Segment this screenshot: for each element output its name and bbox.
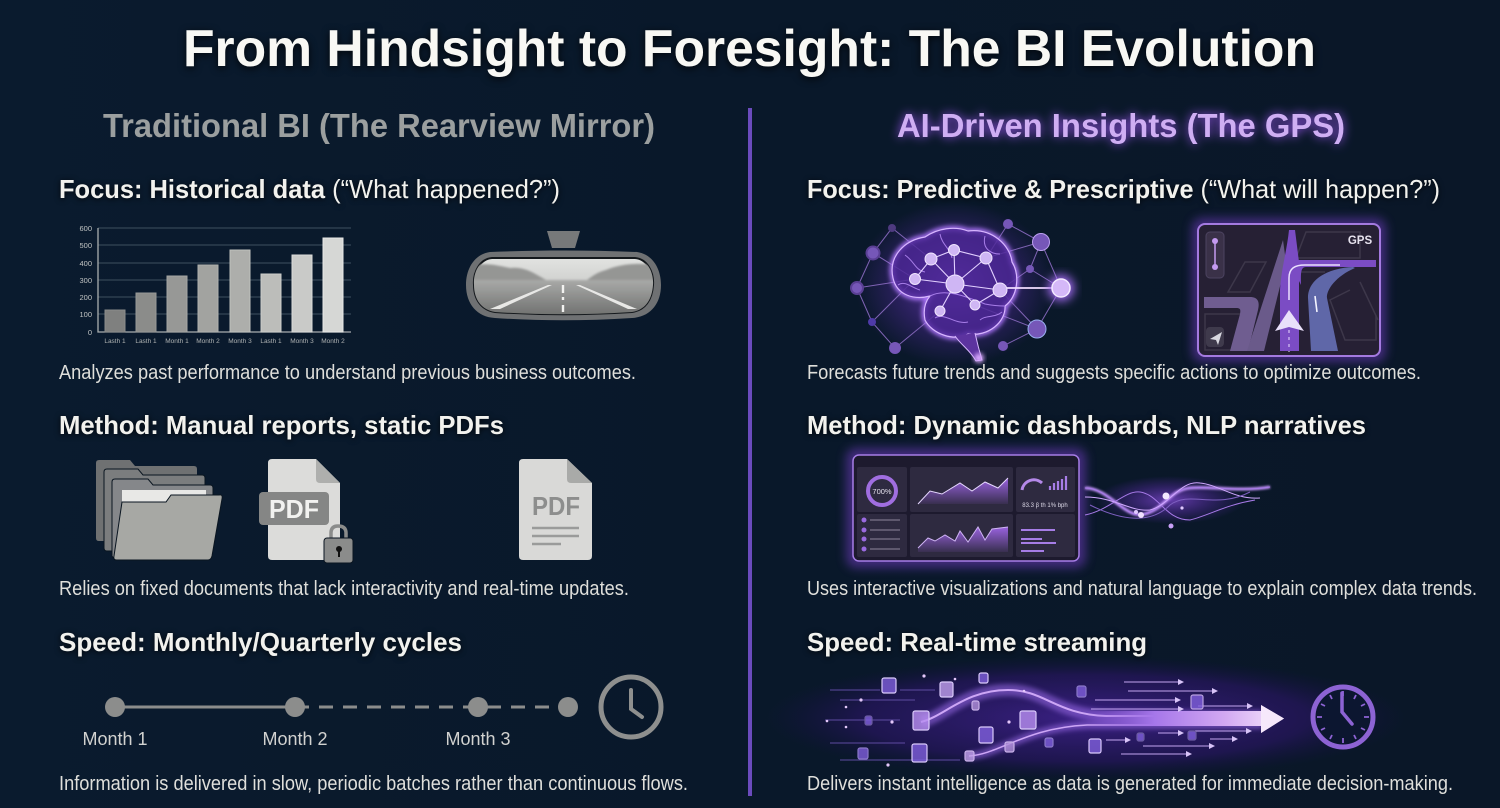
icon: locked PDF xyxy=(259,459,353,563)
illustration: data stream arrow xyxy=(765,656,1405,780)
icon: PDF document xyxy=(519,459,592,560)
text: method description: Relies on fixed documents that lack interactivity and real-time updates. xyxy=(59,578,629,600)
bar chart: Lasth 1 xyxy=(260,338,282,345)
timeline: Month 1 xyxy=(82,729,148,749)
subheading: speed: Speed: Monthly/Quarterly cycles xyxy=(59,627,462,657)
icon: PDF document: PDF xyxy=(532,491,580,521)
icon: GPS navigation screen: GPS xyxy=(1348,235,1372,247)
subheading: method: Method: Dynamic dashboards, NLP narratives xyxy=(807,410,1366,440)
bar chart: Month 2 xyxy=(196,338,220,345)
panel: AI-driven insights xyxy=(765,107,1477,795)
subheading: focus: Focus: Predictive & Prescriptive (“What will happen?”) xyxy=(807,174,1440,204)
bar chart: 300 xyxy=(79,276,92,285)
bar chart: 600 xyxy=(79,224,92,233)
bar chart: 400 xyxy=(79,259,92,268)
timeline xyxy=(82,697,578,749)
icon: neural brain xyxy=(851,202,1074,366)
bar chart: Month 1 xyxy=(165,338,189,345)
panel: traditional BI xyxy=(59,107,688,795)
text: focus description: Forecasts future trends and suggests specific actions to optimize outcomes. xyxy=(807,362,1421,384)
bar chart: 200 xyxy=(79,293,92,302)
dashboard illustration: 83.3 β th 1% bph xyxy=(1022,503,1068,509)
heading: traditional BI: Traditional BI (The Rearview Mirror) xyxy=(103,107,655,144)
dashboard illustration xyxy=(846,448,1086,568)
text: speed description: Information is delivered in slow, periodic batches rather than continuous flows. xyxy=(59,773,688,795)
title: From Hindsight to Foresight: The BI Evolution xyxy=(183,20,1316,78)
icon: purple clock xyxy=(1313,687,1373,747)
bar chart: 0 xyxy=(88,328,92,337)
icon: folders xyxy=(96,460,222,560)
icon: locked PDF: PDF xyxy=(269,494,319,524)
illustration: NLP waves xyxy=(1085,476,1270,528)
icon: clock xyxy=(601,677,661,737)
divider between columns xyxy=(748,108,752,796)
heading: AI-driven insights: AI-Driven Insights (The GPS) xyxy=(897,107,1345,144)
bar chart: Month 3 xyxy=(290,338,314,345)
text: focus description: Analyzes past performance to understand previous business outcomes. xyxy=(59,362,636,384)
subheading: focus: Focus: Historical data (“What happened?”) xyxy=(59,174,560,204)
icon: rearview mirror xyxy=(466,231,661,320)
subheading: speed: Speed: Real-time streaming xyxy=(807,627,1147,657)
icon: GPS navigation screen xyxy=(1192,218,1386,362)
bar chart: Month 2 xyxy=(321,338,345,345)
bar chart: 500 xyxy=(79,241,92,250)
dashboard illustration: 700% xyxy=(872,487,892,496)
bar chart: Lasth 1 xyxy=(104,338,126,345)
timeline: Month 2 xyxy=(262,729,328,749)
subheading: method: Method: Manual reports, static PDFs xyxy=(59,410,504,440)
text: speed description: Delivers instant intelligence as data is generated for immediate decision-making. xyxy=(807,773,1453,795)
bar chart: Month 3 xyxy=(228,338,252,345)
bar chart: 100 xyxy=(79,310,92,319)
bar chart: Lasth 1 xyxy=(135,338,157,345)
bar chart xyxy=(79,224,351,345)
heading: AI-driven insights: AI-Driven Insights (The GPS) xyxy=(897,107,1345,144)
timeline: Month 3 xyxy=(445,729,511,749)
